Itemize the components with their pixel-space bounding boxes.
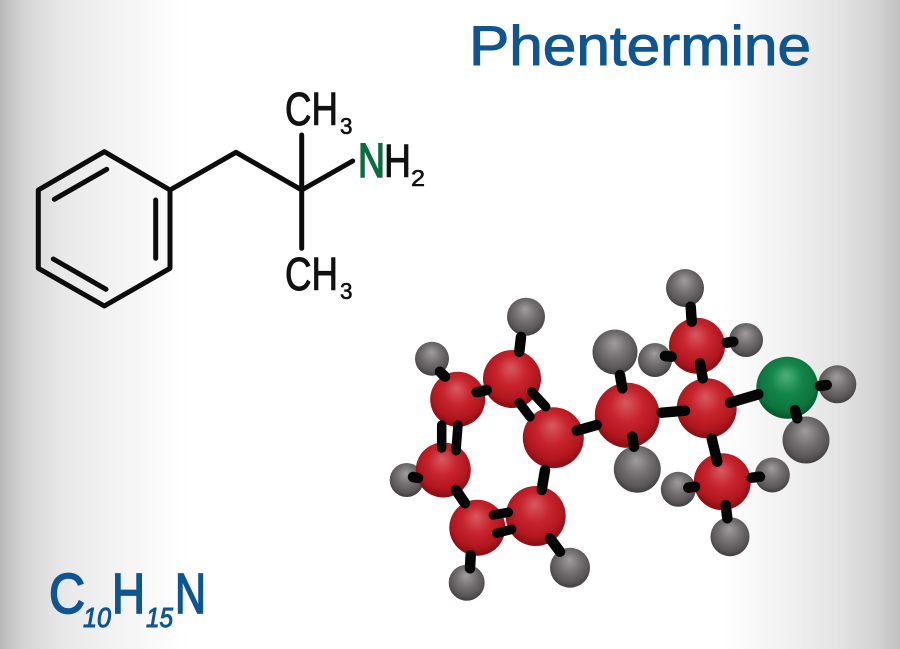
label: bottom CH3: 3	[340, 278, 352, 304]
label: top CH3: 3	[340, 113, 352, 139]
lower hydrogen atoms on top	[614, 416, 830, 493]
chemical formula: H	[112, 562, 145, 626]
label: NH2: H	[384, 135, 411, 187]
chemical formula: 15	[146, 602, 173, 633]
chemical formula: N	[175, 562, 206, 626]
label: NH2	[358, 135, 425, 191]
label: top CH3: CH	[285, 83, 338, 135]
label: NH2: N	[358, 135, 385, 188]
label: bottom CH3: CH	[285, 248, 338, 300]
nitrogen atom	[756, 357, 818, 419]
chemical formula: 10	[83, 602, 111, 633]
bonds	[413, 307, 827, 568]
chemical formula	[49, 562, 206, 633]
title: Phentermine	[469, 14, 811, 77]
structural formula	[38, 83, 425, 306]
label: NH2: 2	[411, 165, 425, 191]
carbon atoms	[416, 318, 751, 556]
hydrogen atoms	[390, 269, 856, 601]
chemical formula: C	[49, 562, 85, 626]
3D ball-and-stick model	[390, 269, 856, 601]
benzene ring and carbon chain	[38, 135, 353, 306]
